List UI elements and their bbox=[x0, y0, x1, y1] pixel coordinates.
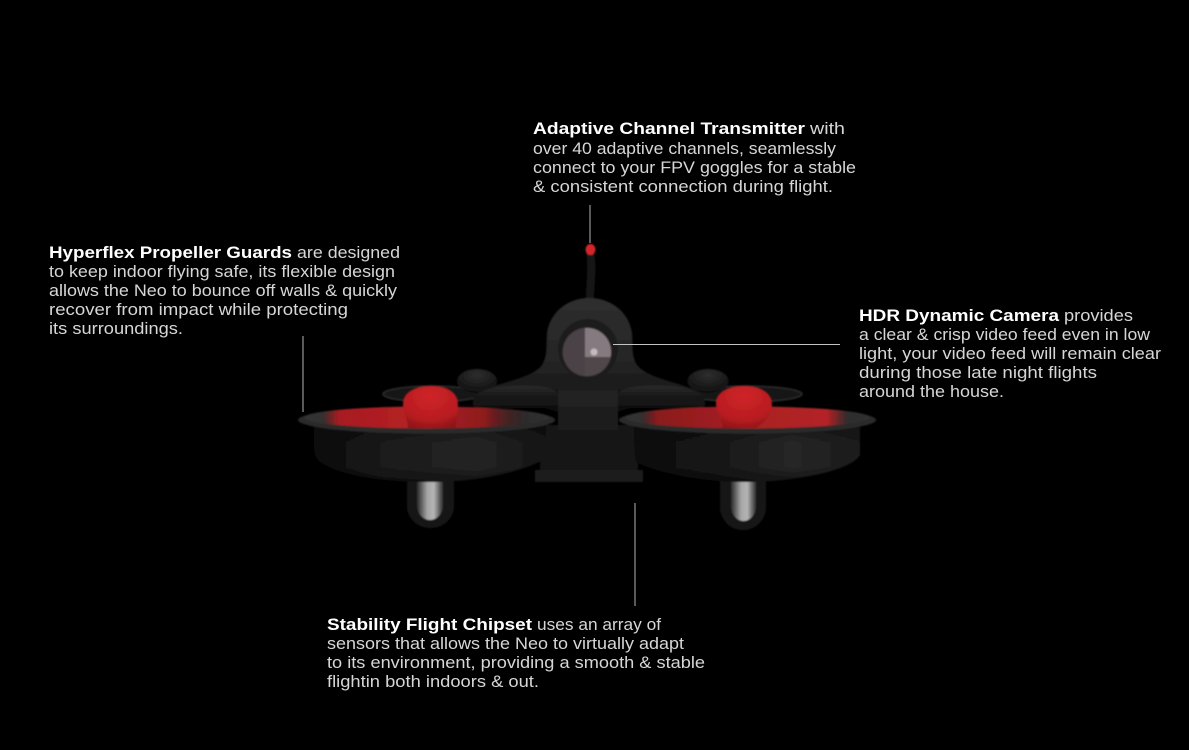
right canopy shoulder bbox=[617, 386, 705, 412]
left landing leg bbox=[407, 480, 454, 528]
text block: Adaptive Channel Transmitter: connect to your FPV goggles for a stable bbox=[533, 159, 856, 177]
drone illustration bbox=[298, 244, 876, 530]
right propeller guard bbox=[619, 386, 876, 482]
text block: Stability Flight Chipset: to its environment, providing a smooth & stable bbox=[327, 654, 705, 672]
antenna bbox=[586, 244, 596, 300]
canopy and camera pod bbox=[473, 298, 705, 405]
text block: Adaptive Channel Transmitter: & consistent connection during flight. bbox=[533, 178, 833, 196]
leader line: propeller guards bbox=[302, 336, 304, 412]
lower centre body bbox=[535, 425, 643, 482]
text block: Adaptive Channel Transmitter: with bbox=[809, 120, 845, 138]
camera bbox=[558, 319, 618, 379]
text block: Hyperflex Propeller Guards: to keep indoor flying safe, its flexible design bbox=[49, 263, 395, 281]
left canopy shoulder bbox=[473, 386, 558, 412]
text block: HDR Dynamic Camera: a clear & crisp video feed even in low bbox=[859, 326, 1150, 344]
rear left motor bbox=[457, 369, 497, 393]
text block: Adaptive Channel Transmitter: Adaptive Channel Transmitter bbox=[533, 119, 805, 138]
rear right motor bbox=[688, 369, 728, 393]
leader line: chipset bbox=[634, 503, 636, 606]
rear left propeller guard bbox=[383, 386, 481, 402]
text block: Stability Flight Chipset: uses an array of bbox=[537, 616, 661, 634]
text block: HDR Dynamic Camera: light, your video feed will remain clear bbox=[859, 345, 1162, 363]
centre column bbox=[558, 390, 618, 430]
left propeller guard bbox=[298, 386, 555, 482]
left propeller blur bbox=[322, 405, 530, 430]
text block: Hyperflex Propeller Guards: are designed bbox=[297, 244, 400, 262]
text block: Adaptive Channel Transmitter: over 40 adaptive channels, seamlessly bbox=[533, 140, 837, 158]
right propeller hub bbox=[716, 386, 772, 428]
text block: HDR Dynamic Camera: HDR Dynamic Camera bbox=[859, 306, 1060, 325]
text block: Adaptive Channel Transmitter bbox=[533, 119, 856, 196]
text block: Stability Flight Chipset: flightin both indoors & out. bbox=[327, 673, 539, 691]
right landing leg bbox=[720, 480, 766, 530]
leader line: transmitter bbox=[589, 205, 591, 243]
rear right propeller guard bbox=[690, 386, 802, 402]
text block: HDR Dynamic Camera: provides bbox=[1064, 307, 1133, 325]
text block: Hyperflex Propeller Guards: recover from impact while protecting bbox=[49, 301, 348, 319]
text block: Hyperflex Propeller Guards: its surroundings. bbox=[49, 320, 183, 338]
text block: Stability Flight Chipset: Stability Flight Chipset bbox=[327, 615, 532, 634]
text block: HDR Dynamic Camera: around the house. bbox=[859, 383, 1004, 401]
text block: Stability Flight Chipset bbox=[327, 615, 705, 691]
text block: Stability Flight Chipset: sensors that allows the Neo to virtually adapt bbox=[327, 635, 684, 653]
text block: Hyperflex Propeller Guards: allows the Neo to bounce off walls & quickly bbox=[49, 282, 398, 300]
left propeller hub bbox=[403, 386, 458, 428]
text block: Hyperflex Propeller Guards: Hyperflex Propeller Guards bbox=[49, 243, 292, 262]
right propeller blur bbox=[640, 405, 848, 430]
text block: HDR Dynamic Camera: during those late night flights bbox=[859, 364, 1097, 382]
leader line: camera bbox=[613, 344, 840, 346]
text block: Hyperflex Propeller Guards bbox=[49, 243, 400, 338]
text block: HDR Dynamic Camera bbox=[859, 306, 1162, 401]
